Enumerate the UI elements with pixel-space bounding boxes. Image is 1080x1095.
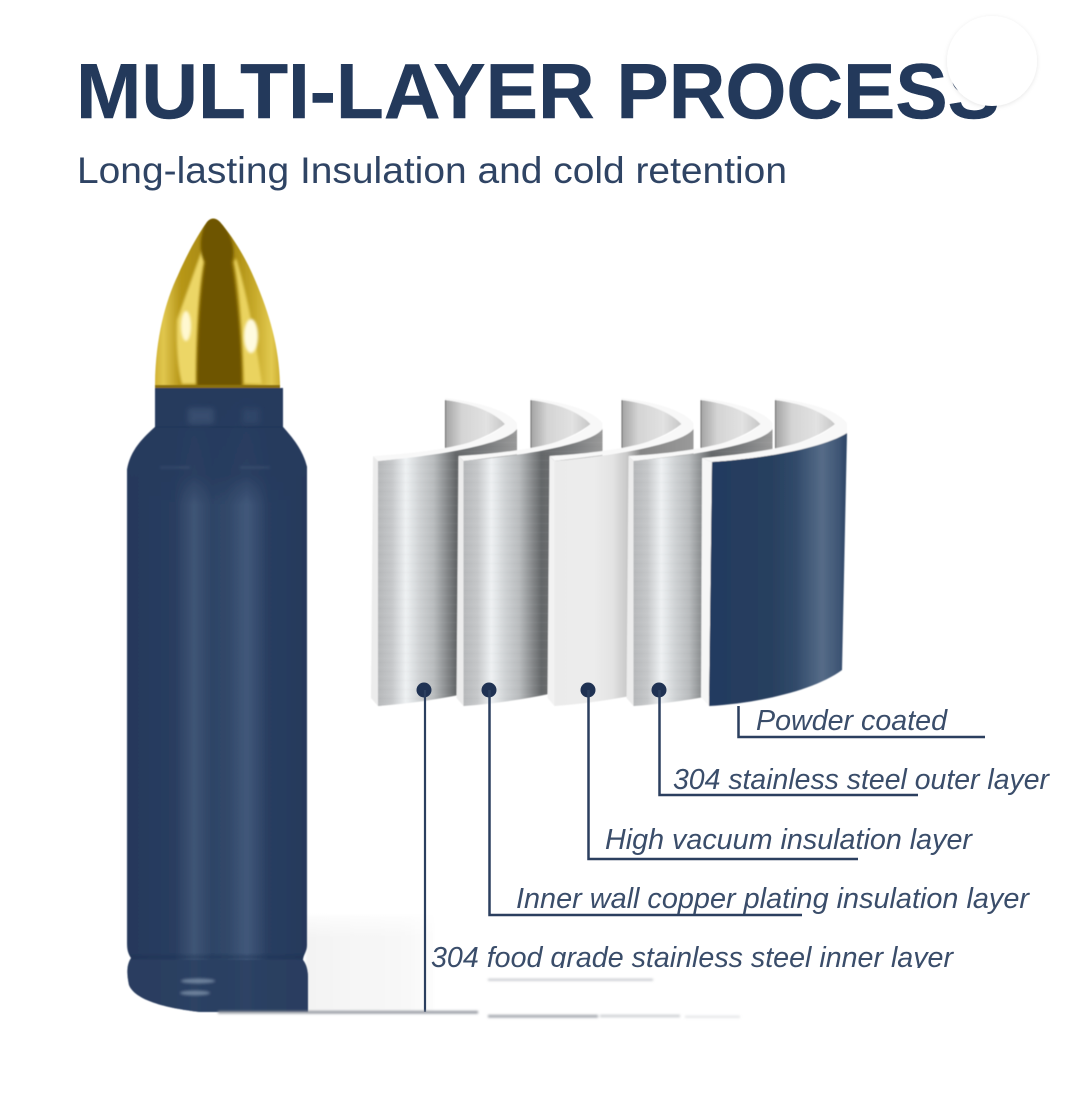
- label: inner wall copper plating insulation layer: [482, 682, 1031, 915]
- round overlay covering the end of the title: [947, 16, 1037, 106]
- label: 304 stainless steel outer layer: 304 stainless steel outer layer: [673, 764, 1050, 796]
- bottle body: [120, 385, 315, 1015]
- label: 304 food grade stainless steel inner layer: 304 food grade stainless steel inner layer: [431, 942, 955, 974]
- bottle: [120, 214, 315, 1015]
- chrome reflections: [177, 250, 204, 384]
- panel 1: food grade stainless steel inner layer: [371, 398, 517, 706]
- panel 2: copper plating insulation layer: [456, 398, 602, 706]
- label: inner wall copper plating insulation layer: Inner wall copper plating insulation layer: [516, 883, 1031, 915]
- label: high vacuum insulation layer: High vacuum insulation layer: [605, 824, 974, 856]
- layered wall panels: [371, 398, 847, 706]
- panel 5: powder coated layer: [701, 398, 847, 706]
- panel 3: high vacuum insulation layer: [548, 398, 694, 706]
- label: powder coated: Powder coated: [756, 705, 948, 737]
- label: 304 stainless steel outer layer: [652, 682, 1050, 796]
- floor shadow beside bottle: [304, 908, 439, 1012]
- label: high vacuum insulation layer: [580, 682, 974, 859]
- smeared reflection artefacts under the label: [218, 979, 740, 1018]
- panel 4: stainless steel outer layer: [626, 398, 772, 706]
- bullet cap: [150, 214, 285, 390]
- subtitle: Long-lasting Insulation and cold retention: [77, 150, 787, 191]
- title: MULTI-LAYER PROCESS: [76, 47, 1000, 135]
- label: 304 food grade stainless steel inner layer: [416, 682, 955, 1012]
